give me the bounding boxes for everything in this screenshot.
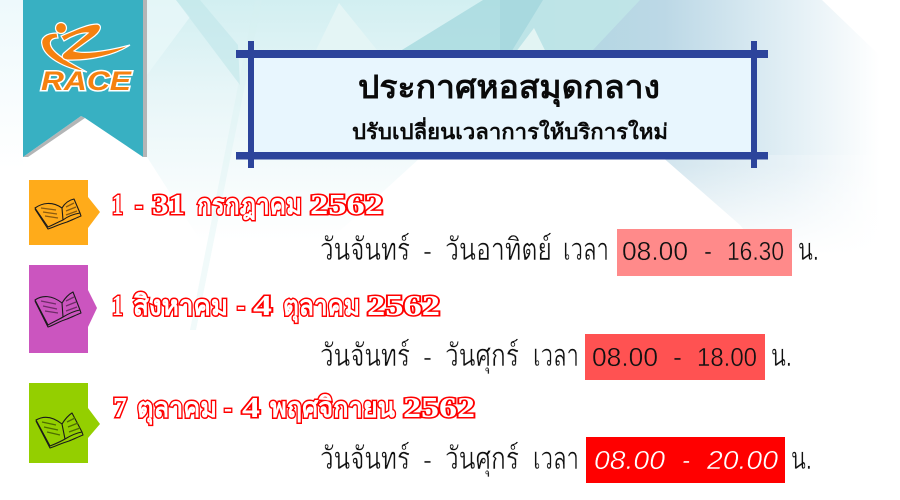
date heading [113,393,475,425]
hours text [320,338,579,375]
time highlight: 08.00 [622,236,688,266]
panel: period 2 [29,265,792,380]
date heading: กรกฎาคม [197,190,302,221]
time highlight: - [704,236,712,266]
date heading [112,291,440,323]
hours text: วันศุกร์ [445,441,519,478]
time highlight: - [682,445,690,475]
date heading: - [237,291,245,322]
date heading: 1 [112,190,123,221]
date heading: 2562 [367,291,440,322]
time highlight: 16.30 [727,236,784,266]
unit: น. [798,232,819,267]
date heading: 31 [152,190,185,221]
date heading: 2562 [310,190,383,221]
icon: purple book tab [29,265,97,353]
panel: announcement header [236,41,768,168]
date heading: พฤศจิกายน [270,393,395,424]
time highlight: 18.00 [697,342,757,372]
time highlight [617,229,792,276]
date heading: สิงหาคม [133,291,228,322]
hours text: วันจันทร์ [320,441,410,476]
hours text [320,441,579,478]
time highlight: 08.00 [594,445,666,475]
hours text: เวลา [563,232,609,267]
hours text [320,232,609,267]
hours text: วันจันทร์ [320,232,410,267]
date heading: 7 [113,393,127,424]
panel: period 1 [29,180,819,276]
date heading: - [135,190,143,221]
heading: ประกาศหอสมุดกลาง [358,69,660,108]
hours text: วันจันทร์ [320,338,410,373]
hours text: - [423,445,432,475]
logo: RACE [41,22,132,96]
date heading: ตุลาคม [137,393,217,425]
time highlight [586,437,785,483]
hours text: วันอาทิตย์ [445,232,552,267]
date heading [112,190,383,221]
logo: RACE: RACE [41,66,132,96]
unit: น. [771,338,792,373]
time highlight: 20.00 [706,445,779,475]
icon: green book tab [29,383,100,463]
date heading: ตุลาคม [283,291,360,323]
panel: period 3 [29,383,812,483]
hours text: - [423,236,432,266]
date heading: 4 [253,291,272,322]
subheading: ปรับเปลี่ยนเวลาการให้บริการใหม่ [352,116,668,144]
unit: น. [791,441,812,476]
time highlight [585,334,765,380]
date heading: - [224,393,232,424]
date heading: 1 [112,291,123,322]
time highlight: - [673,342,682,372]
hours text: เวลา [533,338,579,373]
ribbon with logo [23,0,147,157]
hours text: - [423,342,432,372]
time highlight: 08.00 [592,342,658,372]
date heading: 4 [242,393,260,424]
date heading: 2562 [403,393,475,424]
hours text: เวลา [533,441,579,476]
hours text: วันศุกร์ [445,338,519,375]
icon: orange book tab [29,180,100,245]
